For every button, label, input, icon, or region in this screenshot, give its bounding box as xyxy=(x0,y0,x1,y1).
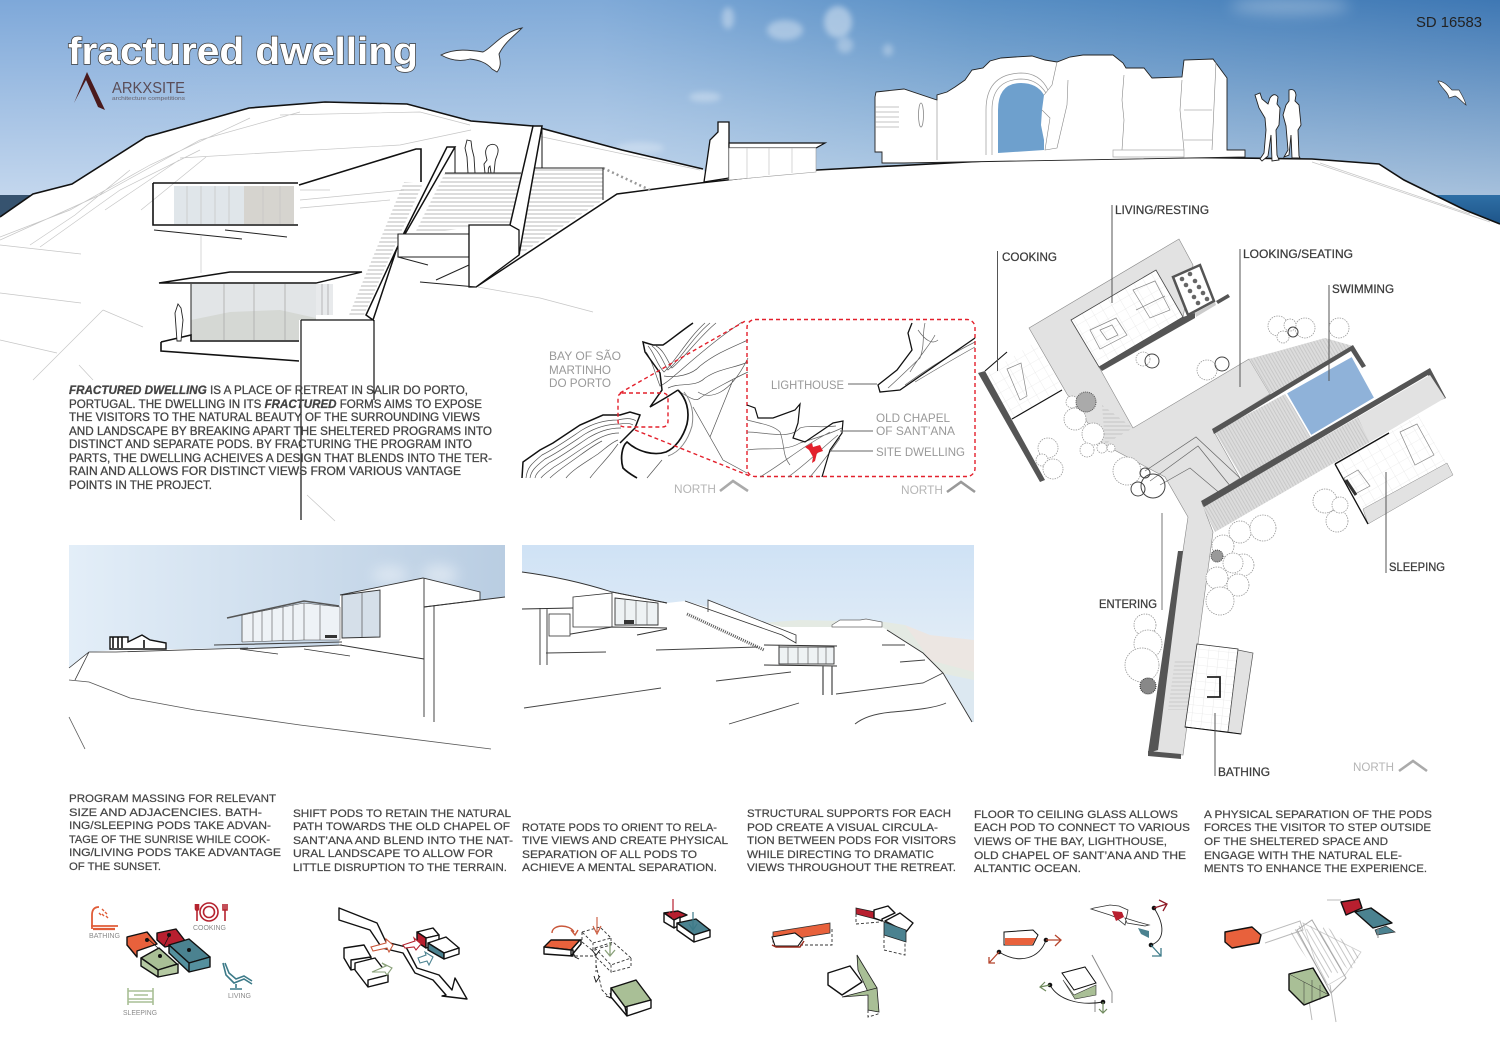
caption 6: A PHYSICAL SEPARATION OF THE PODS xyxy=(1204,809,1432,821)
project number: SD 16583 xyxy=(1416,14,1482,31)
floor plan xyxy=(978,239,1453,759)
small rear pavilion xyxy=(704,122,825,182)
diagram 3: rotate pods xyxy=(544,899,710,1016)
diagram 1: program massing: COOKING xyxy=(193,925,226,932)
diagram 1: program massing: LIVING xyxy=(228,993,251,1000)
orange pod xyxy=(1225,927,1261,948)
plan label: looking/seating xyxy=(1240,248,1353,387)
north headland contours xyxy=(646,322,748,400)
description text: FRACTURED DWELLING IS A PLACE OF RETREAT IN SALIR DO PORTO, xyxy=(69,384,468,397)
map labels: DO PORTO xyxy=(549,377,611,390)
diagram 1: program massing xyxy=(89,903,252,1017)
site location map xyxy=(522,320,975,478)
description text: PORTUGAL. THE DWELLING IN ITS FRACTURED FORMS AIMS TO EXPOSE xyxy=(69,398,482,411)
description text: PARTS, THE DWELLING ACHEIVES A DESIGN THAT BLENDS INTO THE TER- xyxy=(69,452,492,465)
caption 2: LITTLE DISRUPTION TO THE TERRAIN. xyxy=(293,862,507,874)
upper pod xyxy=(573,593,612,627)
caption 5: OLD CHAPEL OF SANT’ANA AND THE xyxy=(974,850,1186,862)
hero building: dwelling perspective xyxy=(153,122,825,520)
map labels: LIGHTHOUSE xyxy=(771,379,844,392)
green pod xyxy=(611,980,651,1016)
plan label: bathing: BATHING xyxy=(1218,766,1270,779)
caption 1: SIZE AND ADJACENCIES. BATH- xyxy=(69,807,262,819)
grey floor slab xyxy=(1029,239,1270,755)
sleeping pod xyxy=(1335,375,1453,524)
diagram 2: shift pods around path xyxy=(339,908,467,999)
red pod xyxy=(157,929,186,947)
hero sky background xyxy=(0,0,1500,230)
icon: lounge chair xyxy=(223,963,252,989)
ground strokes xyxy=(524,645,946,724)
description text: DISTINCT AND SEPARATE PODS. BY FRACTURING THE PROGRAM INTO xyxy=(69,438,472,451)
title: fractured dwelling xyxy=(68,31,418,73)
plan label: entering: ENTERING xyxy=(1099,598,1157,611)
north arrow: inset map xyxy=(901,482,975,497)
caption 4 xyxy=(747,808,956,874)
map labels: MARTINHO xyxy=(549,364,611,377)
shift arrows xyxy=(372,963,392,975)
icon: seagull large xyxy=(441,28,522,72)
north arrow: site map: NORTH xyxy=(674,482,716,496)
west headland contours xyxy=(526,419,636,478)
caption 2: SANT’ANA AND BLEND INTO THE NAT- xyxy=(293,835,513,847)
caption 2: SHIFT PODS TO RETAIN THE NATURAL xyxy=(293,808,511,820)
plan label: living/resting xyxy=(1112,204,1209,303)
caption 4: TION BETWEEN PODS FOR VISITORS xyxy=(747,835,956,847)
caption 1: ING/LIVING PODS TAKE ADVANTAGE xyxy=(69,847,281,859)
diagram 4: structural supports xyxy=(772,906,913,1017)
plan label: swimming: SWIMMING xyxy=(1332,283,1394,296)
icon: bath xyxy=(91,907,118,929)
plan label: swimming xyxy=(1329,283,1394,381)
stepped entry terrace xyxy=(1145,437,1240,495)
description text: AND LANDSCAPE BY BREAKING APART THE SHELTERED PROGRAMS INTO xyxy=(69,425,492,438)
plan label: living/resting: LIVING/RESTING xyxy=(1115,204,1209,217)
caption 5: VIEWS OF THE BAY, LIGHTHOUSE, xyxy=(974,836,1167,848)
walls xyxy=(1148,345,1446,759)
chapel silhouette xyxy=(110,635,166,649)
caption 3: TIVE VIEWS AND CREATE PHYSICAL xyxy=(522,835,728,847)
red zoom callout xyxy=(618,320,975,476)
logo: arkxsite: ARKXSITE xyxy=(112,80,185,97)
outdoor fireplace grid xyxy=(1173,265,1214,315)
orange pod xyxy=(127,932,157,957)
description text xyxy=(69,384,492,492)
caption 2: URAL LANDSCAPE TO ALLOW FOR xyxy=(293,848,493,860)
caption 3: ROTATE PODS TO ORIENT TO RELA- xyxy=(522,822,717,834)
rendering: view from the chapel side xyxy=(69,545,505,770)
hero hill and ground xyxy=(0,102,1500,530)
caption 1 xyxy=(69,793,281,873)
site dwelling marker xyxy=(805,443,823,463)
logo: arkxsite xyxy=(74,72,185,110)
caption 1: TAGE OF THE SUNRISE WHILE COOK- xyxy=(69,834,270,846)
caption 1: ING/SLEEPING PODS TAKE ADVAN- xyxy=(69,820,271,832)
icon: bed xyxy=(128,988,153,1005)
plan label: entering xyxy=(1099,513,1162,611)
caption 5: EACH POD TO CONNECT TO VARIOUS xyxy=(974,822,1190,834)
bay arc xyxy=(622,390,688,478)
teal pod xyxy=(169,939,210,972)
plan label: cooking: COOKING xyxy=(1002,251,1057,264)
living pod xyxy=(1071,270,1230,371)
pods xyxy=(344,945,371,970)
caption 4: VIEWS THROUGHOUT THE RETREAT. xyxy=(747,862,956,874)
description text: RAIN AND ALLOWS FOR DISTINCT VIEWS FROM VARIOUS VANTAGE xyxy=(69,465,461,478)
caption 1: OF THE SUNSET. xyxy=(69,861,161,873)
logo: arkxsite: architecture competitions xyxy=(112,96,185,102)
caption 4: STRUCTURAL SUPPORTS FOR EACH xyxy=(747,808,951,820)
map labels: OF SANT’ANA xyxy=(876,425,955,438)
caption 5 xyxy=(974,809,1190,875)
icon: plate and cutlery xyxy=(196,903,227,921)
lower pod xyxy=(779,647,834,664)
teal pod xyxy=(1355,908,1395,938)
diagram 6: physical separation xyxy=(1225,899,1395,1022)
caption 3: ACHIEVE A MENTAL SEPARATION. xyxy=(522,862,717,874)
map labels: OLD CHAPEL xyxy=(876,412,951,425)
map labels: SITE DWELLING xyxy=(876,446,965,459)
caption 6: OF THE SHELTERED SPACE AND xyxy=(1204,836,1388,848)
plan label: cooking xyxy=(998,251,1057,371)
plan label: looking/seating: LOOKING/SEATING xyxy=(1243,248,1353,261)
upper glass pod xyxy=(153,149,421,273)
rendering: view from the cliff xyxy=(522,545,974,730)
map labels: BAY OF SÃO xyxy=(549,350,621,363)
diagram 5: floor to ceiling glass views xyxy=(989,900,1167,1013)
ramp walls xyxy=(685,600,796,643)
bathing pod xyxy=(1185,644,1253,734)
caption 3: SEPARATION OF ALL PODS TO xyxy=(522,849,697,861)
plan label: sleeping: SLEEPING xyxy=(1389,561,1445,574)
caption 6: ENGAGE WITH THE NATURAL ELE- xyxy=(1204,850,1402,862)
map labels xyxy=(549,350,965,459)
green pod xyxy=(1289,968,1329,1005)
caption 5: FLOOR TO CEILING GLASS ALLOWS xyxy=(974,809,1178,821)
plan label: bathing xyxy=(1215,713,1270,779)
plan label: sleeping xyxy=(1386,472,1445,574)
landscape trees xyxy=(1036,316,1349,694)
caption 5: ALTANTIC OCEAN. xyxy=(974,863,1081,875)
people on stairs xyxy=(465,140,498,173)
caption 1: PROGRAM MASSING FOR RELEVANT xyxy=(69,793,276,805)
description text: THE VISITORS TO THE NATURAL BEAUTY OF THE SURROUNDING VIEWS xyxy=(69,411,480,424)
caption 4: WHILE DIRECTING TO DRAMATIC xyxy=(747,849,934,861)
figures on the ridge xyxy=(1255,90,1301,161)
caption 6: MENTS TO ENHANCE THE EXPERIENCE. xyxy=(1204,863,1427,875)
pod glass xyxy=(242,603,340,642)
far chapel xyxy=(832,619,882,627)
diagram 1: program massing: SLEEPING xyxy=(123,1010,157,1017)
concrete block xyxy=(342,590,380,638)
lower glass pod xyxy=(159,272,362,361)
inland roads xyxy=(647,358,748,478)
inset contours xyxy=(747,323,975,477)
north arrow: floor plan: NORTH xyxy=(1353,760,1394,774)
stairs xyxy=(349,168,650,315)
icon: seagull small xyxy=(1438,81,1466,105)
caption 6 xyxy=(1204,809,1432,875)
caption 2 xyxy=(293,808,513,874)
caption 6: FORCES THE VISITOR TO STEP OUTSIDE xyxy=(1204,822,1431,834)
description text: POINTS IN THE PROJECT. xyxy=(69,479,212,492)
concrete walls xyxy=(299,126,542,520)
north arrow: inset map: NORTH xyxy=(901,483,943,497)
north arrow: floor plan xyxy=(1353,760,1427,774)
swimming pool xyxy=(1286,356,1375,436)
ground contour xyxy=(69,680,491,749)
chapel ruins xyxy=(875,55,1245,163)
north arrow: site map xyxy=(674,481,748,496)
caption 4: POD CREATE A VISUAL CIRCULA- xyxy=(747,822,938,834)
red pod xyxy=(1341,899,1362,915)
caption 2: PATH TOWARDS THE OLD CHAPEL OF xyxy=(293,821,510,833)
decks xyxy=(1249,338,1353,394)
cooking pod xyxy=(978,342,1063,482)
green pod xyxy=(141,948,178,977)
diagram 1: program massing: BATHING xyxy=(89,933,120,940)
caption 3 xyxy=(522,822,728,874)
red and teal pods xyxy=(664,899,710,942)
